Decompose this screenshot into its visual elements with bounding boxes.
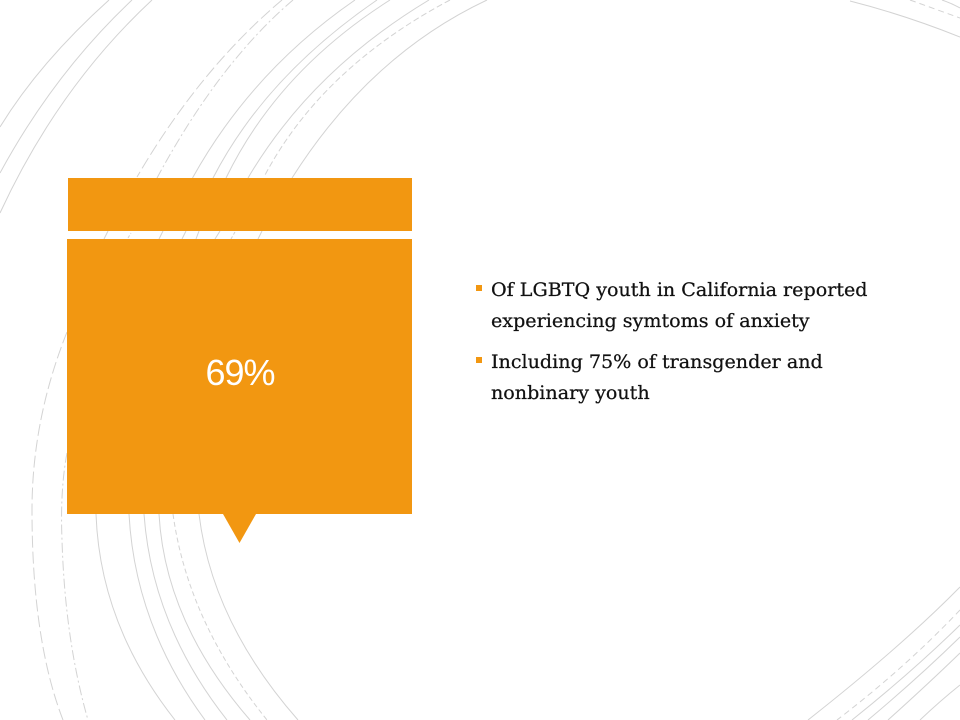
bullet: transgender and nonbinary youth: Including 75% of transgender and [491,350,823,373]
bullet: anxiety among LGBTQ youth: Of LGBTQ youth in California reported [491,278,868,301]
bullet: transgender and nonbinary youth: nonbinary youth [491,381,650,404]
statistic: 69%: 69% [205,352,275,393]
panel: callout with pointer [67,239,412,543]
bullet: anxiety among LGBTQ youth [476,278,868,332]
panel: title bar [68,178,412,231]
callout pointer [223,514,256,543]
callout body [67,239,412,514]
text block: bullet list [476,278,868,404]
bullet: anxiety among LGBTQ youth: experiencing symtoms of anxiety [491,309,810,332]
bullet: transgender and nonbinary youth [476,350,823,404]
